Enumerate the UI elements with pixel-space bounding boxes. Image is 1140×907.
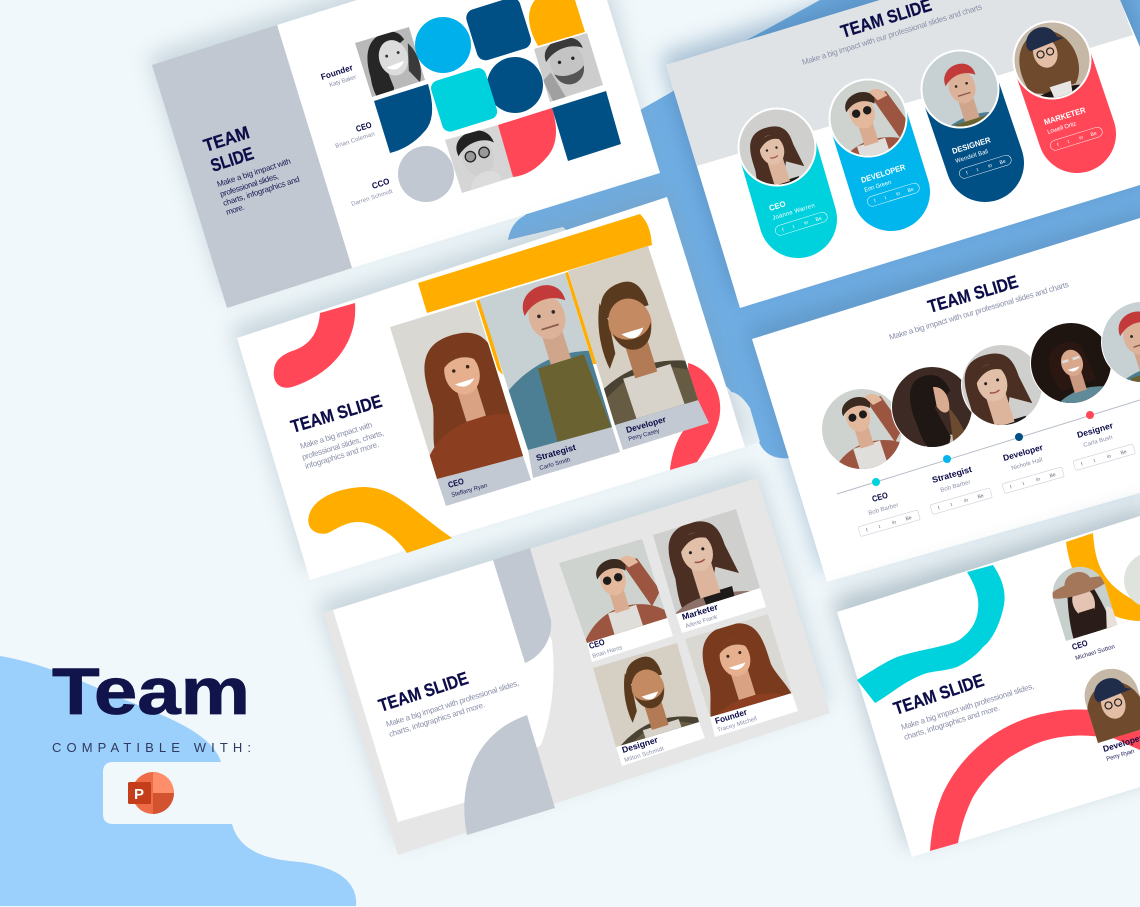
panel: slide 3 tall photos xyxy=(227,188,749,580)
card: ceo: Joanne Warren xyxy=(772,203,816,222)
card: designer: t xyxy=(976,167,980,173)
card: strategist xyxy=(479,273,620,478)
panel: slide 1 mosaic xyxy=(144,0,660,308)
card: designer: Wendell Ball xyxy=(955,149,989,165)
card: designer xyxy=(920,50,1024,202)
member: ceo: t xyxy=(878,524,882,530)
heading: TEAM SLIDE xyxy=(288,391,384,437)
photo: glasses man xyxy=(445,125,513,193)
shape: grey circle xyxy=(398,146,454,202)
description: Make a big impact with xyxy=(299,420,373,451)
description: infographics and more. xyxy=(304,440,380,471)
shape: yellow wave xyxy=(308,487,452,553)
panel: slide 2 capsule cards xyxy=(626,0,1140,315)
background blob: light blue xyxy=(0,656,356,906)
photo: founder xyxy=(355,27,425,97)
shape: navy rounded square xyxy=(464,0,533,63)
member: ceo xyxy=(858,490,920,537)
member: ceo: Michael Sutton xyxy=(1075,644,1116,662)
card: ceo xyxy=(559,539,673,662)
card: designer xyxy=(593,643,705,766)
heading: TEAM SLIDE xyxy=(891,670,986,719)
member: designer: Designer xyxy=(1076,420,1115,440)
heading: SLIDE xyxy=(208,143,256,176)
description: professional slides, xyxy=(219,171,280,199)
shape: yellow curve xyxy=(1066,533,1140,621)
shape: cropped arch xyxy=(1124,552,1140,608)
card: marketer xyxy=(1012,20,1116,173)
heading: TEAM SLIDE xyxy=(926,272,1020,317)
description: more. xyxy=(225,202,246,217)
member: ceo: Be xyxy=(905,515,913,522)
shape: red blob xyxy=(274,303,355,388)
card: marketer xyxy=(653,509,766,633)
subheading: Make a big impact with our professional slides and charts xyxy=(801,2,983,67)
member: designer: f xyxy=(1081,461,1084,468)
card: ceo: CEO xyxy=(768,199,787,213)
description xyxy=(216,157,301,217)
member: ceo: f xyxy=(866,527,869,534)
card: founder xyxy=(685,614,798,737)
icon: PowerPoint xyxy=(128,772,174,814)
member: designer xyxy=(1073,420,1135,471)
card: developer: Perry Casey xyxy=(628,428,660,443)
label: cco xyxy=(351,176,394,208)
member: developer: Perry Ryan xyxy=(1106,749,1135,763)
card: ceo: CEO xyxy=(447,476,465,490)
member: strategist: in xyxy=(964,497,969,504)
card: marketer: Lowell Ortiz xyxy=(1047,121,1077,136)
description: charts, infographics and more. xyxy=(388,700,486,739)
member: developer: Nichole Hall xyxy=(1011,457,1043,472)
card: developer xyxy=(828,78,930,231)
card: developer: Erin Green xyxy=(864,180,892,194)
member: developer: f xyxy=(1010,484,1013,491)
panel: slide 5 photo grid xyxy=(314,462,834,855)
shape: blue circle xyxy=(415,17,471,73)
shape: yellow quarter xyxy=(529,0,585,46)
description xyxy=(299,420,385,471)
card: marketer: Marketer xyxy=(681,601,720,622)
card: designer: Be xyxy=(999,158,1007,166)
member: strategist: f xyxy=(938,505,941,512)
card: ceo: f xyxy=(782,227,785,234)
card: founder: Tracey Mitchell xyxy=(717,716,758,734)
card: developer: in xyxy=(896,191,901,198)
shape: cyan rounded square xyxy=(429,66,499,134)
member: strategist xyxy=(930,464,992,515)
label: founder xyxy=(320,62,357,89)
timeline xyxy=(837,400,1140,494)
member: designer: t xyxy=(1093,458,1097,464)
member: ceo: CEO xyxy=(1071,638,1089,652)
card: designer: f xyxy=(966,170,969,177)
decoration: light rounded shape xyxy=(725,392,760,447)
card: ceo xyxy=(390,301,531,506)
member: strategist: t xyxy=(950,502,954,508)
member: developer: in xyxy=(1036,476,1041,483)
member: ceo: Bob Barber xyxy=(868,503,899,517)
card: marketer: MARKETER xyxy=(1043,105,1087,127)
label: cco: Darren Schmidt xyxy=(351,189,394,208)
shape: red arc xyxy=(930,709,1100,851)
member: developer: Be xyxy=(1049,472,1057,479)
card: developer: t xyxy=(884,195,888,201)
label: cco: CCO xyxy=(371,176,391,191)
member: ceo: in xyxy=(892,519,897,526)
member: strategist: Strategist xyxy=(931,464,973,485)
card: developer: f xyxy=(874,198,877,205)
label: founder: Founder xyxy=(320,62,355,82)
member: designer: Be xyxy=(1120,449,1128,456)
member: ceo: CEO xyxy=(871,490,889,504)
icon: PowerPoint: P xyxy=(134,786,144,803)
card: designer: Milton Schmidt xyxy=(624,746,665,764)
subtitle: compatible with: COMPATIBLE WITH: xyxy=(52,740,251,755)
shape: navy circle xyxy=(487,57,543,113)
description: professional slides, charts, xyxy=(301,428,385,462)
member: designer: Carla Bush xyxy=(1083,435,1113,449)
card: marketer: f xyxy=(1057,142,1060,149)
member: developer: t xyxy=(1022,481,1026,487)
label: ceo: Brian Coleman xyxy=(335,132,376,150)
card: marketer: in xyxy=(1079,135,1084,142)
label: ceo: CEO xyxy=(355,119,373,134)
description: Make a big impact with xyxy=(216,157,292,189)
card: ceo: Steffany Ryan xyxy=(451,483,488,499)
heading: TEAM xyxy=(201,122,252,156)
panel: slide 6 arches xyxy=(831,464,1140,868)
photo: phone man xyxy=(534,33,603,102)
label: founder: Katy Baker xyxy=(329,75,357,89)
shape: yellow band xyxy=(418,214,652,375)
card: developer xyxy=(568,246,709,450)
card: ceo: t xyxy=(792,224,796,230)
card: developer: Be xyxy=(907,186,915,194)
card: strategist: Strategist xyxy=(535,442,577,463)
card: ceo: Brian Harris xyxy=(592,645,623,660)
shape: red quarter xyxy=(498,108,556,177)
card: ceo: Be xyxy=(815,215,823,223)
card: marketer: t xyxy=(1067,139,1071,145)
description: charts, infographics and xyxy=(222,175,301,208)
background panel: dark blue xyxy=(508,0,1140,458)
shape: upper grey curve xyxy=(493,548,551,663)
shape: navy square xyxy=(552,91,621,161)
card: developer: Developer xyxy=(625,414,668,435)
shape: lower grey arc xyxy=(464,715,555,835)
label: ceo xyxy=(335,119,376,150)
shape: cyan wave xyxy=(857,565,1005,703)
subheading: Make a big impact with our professional slides and charts xyxy=(888,280,1070,342)
member: developer xyxy=(1002,442,1064,494)
card: marketer: Be xyxy=(1090,130,1098,138)
title: Team: Team xyxy=(52,654,250,728)
description: Make a big impact with professional slides, xyxy=(900,682,1035,732)
shape: navy quarter xyxy=(374,84,432,153)
card: ceo: CEO xyxy=(588,637,606,651)
panel: slide 4 timeline xyxy=(746,207,1140,582)
card: founder: Founder xyxy=(714,707,749,726)
member: developer: Developer xyxy=(1002,442,1045,463)
member: strategist: Bob Barber xyxy=(940,480,971,494)
member: ceo xyxy=(1052,566,1118,660)
description: Make a big impact with professional slides, xyxy=(385,679,520,729)
card: ceo xyxy=(738,108,837,258)
shape: red curve xyxy=(670,363,720,470)
card: designer: DESIGNER xyxy=(951,135,992,156)
member: strategist: Be xyxy=(977,493,985,500)
card: ceo: in xyxy=(804,220,809,227)
member: developer xyxy=(1084,668,1140,761)
description: charts, infographics and more. xyxy=(903,703,1001,742)
photo row xyxy=(822,302,1140,469)
card: marketer: Arlene Frank xyxy=(685,614,719,630)
heading: TEAM SLIDE xyxy=(376,668,471,716)
member: designer: in xyxy=(1107,453,1112,460)
card: designer: Designer xyxy=(621,734,660,755)
card: developer: DEVELOPER xyxy=(860,163,907,185)
card: designer: in xyxy=(988,163,993,170)
heading xyxy=(201,122,256,176)
badge: software pill xyxy=(103,762,262,824)
card: strategist: Carlo Smith xyxy=(539,457,571,472)
